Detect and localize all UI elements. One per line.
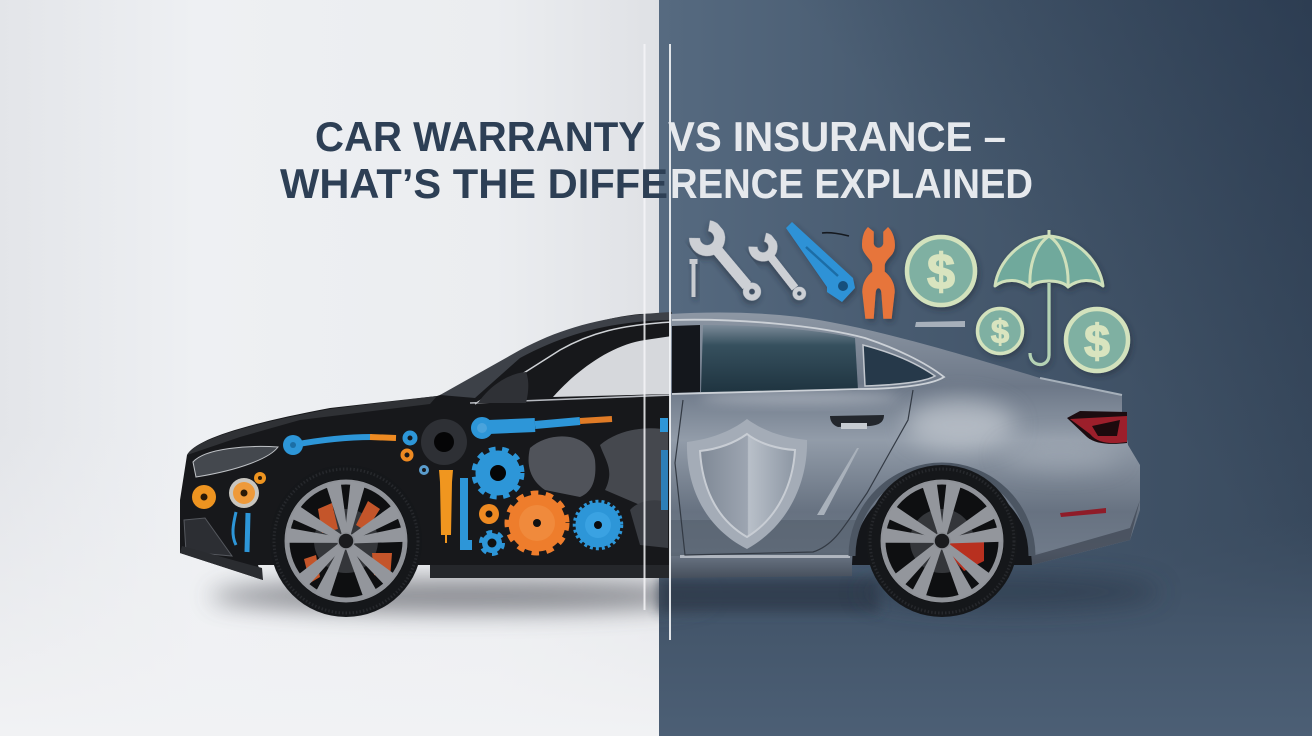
hood panel [187, 396, 437, 455]
trunk lip highlight [1040, 378, 1122, 395]
car body: exposed mechanical side [180, 312, 672, 580]
orange brake caliper [304, 501, 392, 583]
shield emblem [687, 419, 807, 549]
icon: nail [690, 259, 698, 297]
door handle [830, 415, 884, 427]
car body: insured grey side [670, 313, 1140, 578]
front splitter [180, 546, 263, 580]
engine lower block [630, 500, 668, 548]
rocker panel [430, 565, 672, 578]
title: WHAT’S THE DIFFE [280, 160, 668, 207]
headlight [193, 446, 278, 477]
tail light [1067, 411, 1127, 444]
blue tube wrench [283, 435, 396, 455]
icon: dollar coin large [907, 237, 975, 305]
icon: silver wrench large [692, 224, 765, 304]
icon: blue pliers [786, 222, 855, 302]
side window glass [553, 336, 672, 397]
side window [701, 325, 858, 392]
icon: dark line [822, 233, 849, 236]
title: CAR WARRANTY [315, 113, 645, 160]
black washer [421, 419, 467, 465]
ground shadow under car [210, 574, 1160, 613]
upper blue wrench [474, 419, 612, 436]
small parts row [402, 433, 428, 474]
rear wheel arch interior [852, 475, 1032, 565]
orange ring [479, 504, 499, 524]
title [280, 113, 1033, 207]
blue rod [460, 478, 472, 550]
icon: dollar coin medium: $ [1084, 315, 1110, 367]
front orange discs [192, 472, 266, 509]
background: insurance side [659, 0, 1312, 736]
small blue gear [481, 532, 503, 554]
blue gear large [474, 449, 522, 497]
wing mirror [478, 372, 528, 403]
orange gear [507, 493, 567, 553]
icon: dollar coin small [978, 308, 1022, 354]
title: RENCE EXPLAINED [670, 160, 1033, 207]
body highlights [670, 392, 1140, 565]
icon: orange wrench [863, 228, 894, 318]
B-pillar dark strip [672, 325, 700, 393]
window chrome line [672, 320, 944, 394]
wheel arch rear [852, 466, 1032, 556]
icon: dollar coin medium [1066, 309, 1128, 371]
crease slash [817, 448, 859, 515]
engine housing [600, 428, 668, 505]
blue parts at split [660, 418, 668, 510]
icon: dollar coin large: $ [927, 244, 955, 300]
orange rod [439, 470, 453, 543]
lower grille [184, 518, 232, 556]
door sill chrome line [470, 395, 672, 403]
door seams [675, 390, 913, 555]
front wheel [270, 465, 422, 617]
icon: dollar coin small: $ [991, 313, 1009, 350]
A-pillar and roof rail [440, 312, 672, 398]
blue gear right [574, 502, 622, 548]
red brake caliper [946, 539, 984, 571]
front blue tubes [233, 512, 248, 552]
title: VS INSURANCE – [668, 113, 1006, 160]
engine block [529, 436, 595, 497]
icon: silver wrench small [751, 236, 810, 303]
background: warranty side [0, 0, 660, 736]
rear quarter window [863, 345, 935, 386]
icon: grey bar [915, 321, 965, 327]
door handle highlight [841, 423, 867, 429]
icon: umbrella [995, 230, 1103, 365]
vertical divider lines [644, 44, 671, 640]
rear wheel [866, 465, 1018, 617]
chrome window line [475, 322, 672, 404]
side marker [1060, 508, 1106, 517]
